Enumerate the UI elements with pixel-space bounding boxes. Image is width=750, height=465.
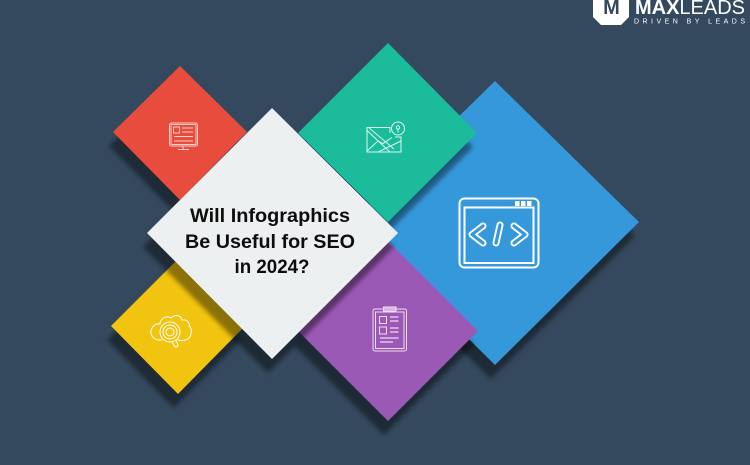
icon: clipboard checklist	[373, 307, 406, 351]
icon: envelope with alert	[366, 122, 404, 152]
panel: green diamond	[294, 43, 477, 236]
title: Will Infographics	[190, 206, 350, 227]
panel: red diamond	[109, 66, 247, 214]
panel: white title diamond	[143, 108, 398, 373]
logo wordmark: DRIVEN BY LEADS	[634, 18, 745, 26]
panel: blue diamond	[347, 81, 639, 379]
panel: purple diamond	[294, 241, 478, 435]
title	[185, 206, 355, 278]
logo mark	[593, 0, 629, 25]
icon: monitor with article	[170, 123, 198, 150]
title: in 2024?	[234, 257, 310, 278]
panel: yellow diamond	[107, 259, 245, 408]
title: Be Useful for SEO	[185, 232, 355, 253]
icon: cloud with magnifier	[151, 316, 191, 347]
icon: code window	[460, 198, 538, 268]
logo	[593, 0, 745, 26]
